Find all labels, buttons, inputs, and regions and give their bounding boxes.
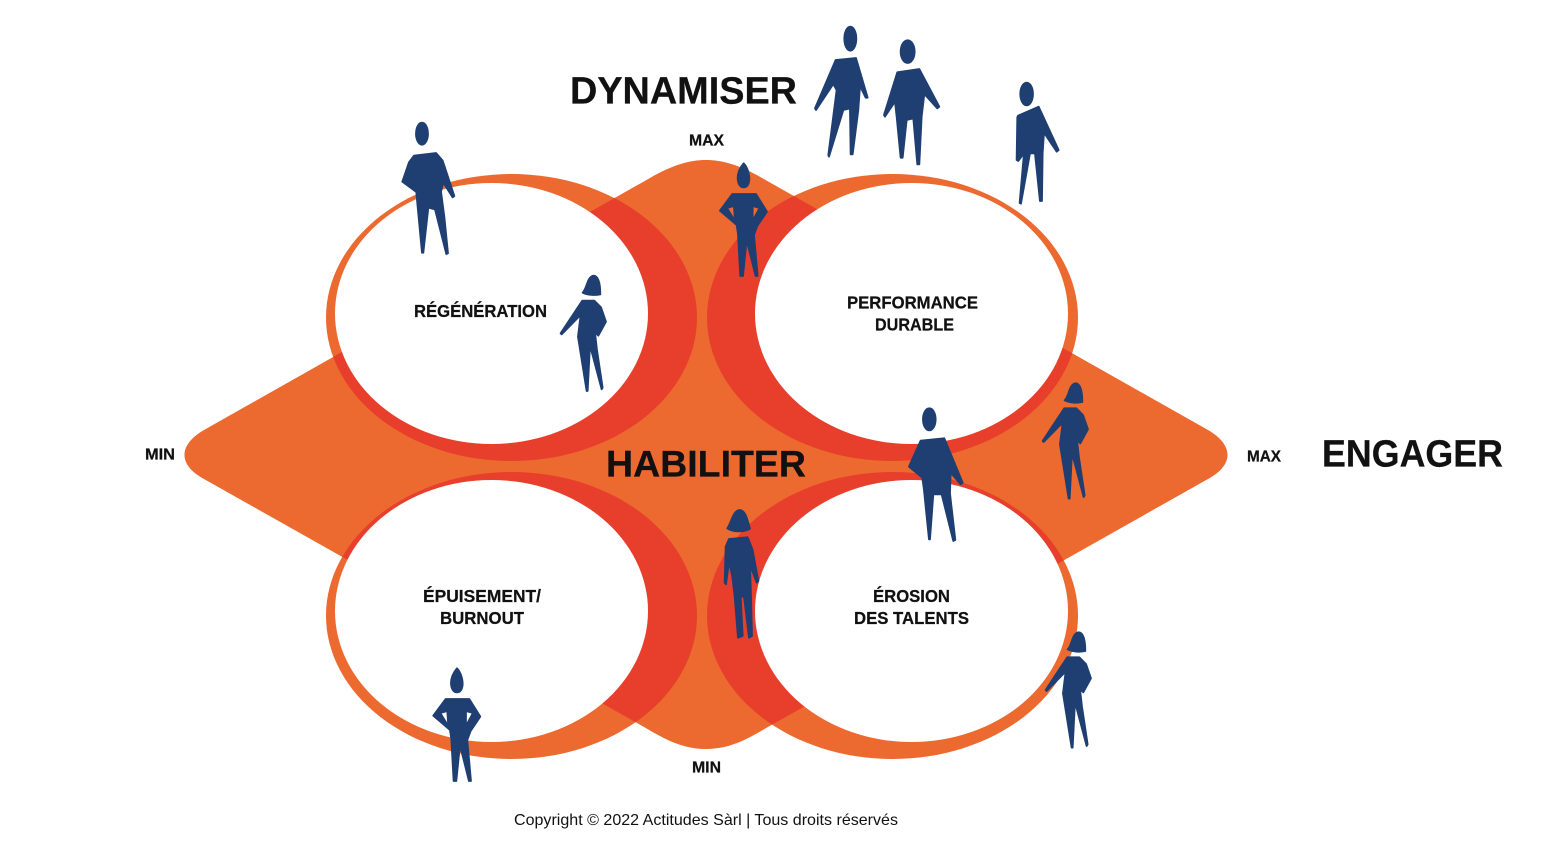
label: erosion des talents: ÉROSION bbox=[873, 585, 950, 606]
person: woman on right lozenge bbox=[1043, 383, 1088, 499]
red overlap of rings and lozenge bbox=[333, 196, 1072, 724]
lozenge background bbox=[184, 160, 1228, 749]
axis label: top max: MAX bbox=[689, 132, 724, 150]
heading: dynamiser: DYNAMISER bbox=[570, 70, 797, 112]
copyright: Copyright © 2022 Actitudes Sàrl | Tous droits réservés bbox=[514, 812, 898, 829]
outer orange rings bbox=[326, 174, 1078, 759]
label: epuisement burnout bbox=[423, 585, 541, 628]
label: performance durable: PERFORMANCE bbox=[847, 292, 978, 312]
heading: engager: ENGAGER bbox=[1322, 434, 1503, 476]
person: man top left bbox=[402, 123, 454, 254]
panel: regeneration bbox=[335, 183, 648, 444]
label: performance durable bbox=[847, 292, 978, 334]
label: epuisement burnout: ÉPUISEMENT/ bbox=[423, 585, 541, 606]
label: epuisement burnout: BURNOUT bbox=[440, 608, 524, 628]
person: man hands on hips bottom bbox=[433, 668, 480, 781]
person: tall man top bbox=[815, 27, 868, 157]
panel: epuisement burnout bbox=[335, 480, 648, 742]
person: stocky man top bbox=[884, 40, 939, 164]
panel: performance durable bbox=[755, 183, 1068, 444]
label: erosion des talents bbox=[854, 585, 969, 628]
label: performance durable: DURABLE bbox=[875, 314, 954, 334]
person: man centre right bbox=[909, 408, 963, 541]
person: woman lower right bbox=[1046, 632, 1091, 748]
person: woman centre bottom bbox=[725, 510, 758, 638]
person: man hands on hips top centre bbox=[720, 163, 767, 276]
person: man top right bbox=[1017, 83, 1059, 204]
heading: habiliter: HABILITER bbox=[606, 444, 806, 484]
diagram: four quadrants on orange lozenge bbox=[184, 160, 1228, 759]
axis label: left min: MIN bbox=[145, 446, 175, 464]
label: erosion des talents: DES TALENTS bbox=[854, 608, 969, 628]
label: regeneration: RÉGÉNÉRATION bbox=[414, 300, 547, 321]
axis label: right max: MAX bbox=[1247, 448, 1281, 466]
person: woman in regeneration bbox=[561, 276, 606, 391]
panel: erosion des talents bbox=[755, 480, 1068, 742]
axis label: bottom min: MIN bbox=[692, 760, 721, 776]
